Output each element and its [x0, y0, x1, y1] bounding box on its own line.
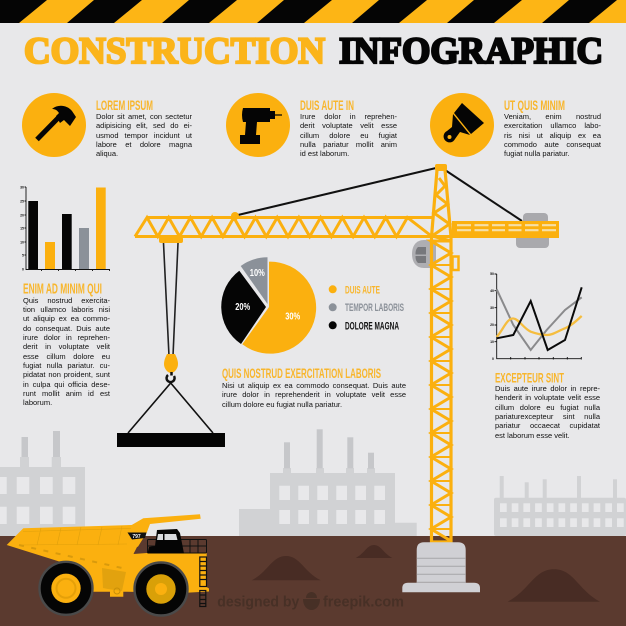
watermark: designed by	[217, 594, 299, 610]
text: quis nostrud	[222, 381, 406, 409]
text: lorem ipsum: Dolor sit amet, con sectetur	[96, 112, 192, 121]
text: enim ad minim qui: pidatat non proident, sunt	[23, 370, 110, 379]
text: lorem ipsum: usmod tempor incidunt ut	[96, 131, 192, 140]
line chart: 40	[490, 289, 494, 293]
bar chart: 15	[20, 226, 24, 230]
headings: top row: DUIS AUTE IN	[300, 97, 354, 113]
text: enim ad minim qui: ut aliquip ex ea commo-	[23, 314, 110, 323]
crane jib	[135, 212, 452, 243]
text: duis aute in: cillum dolore eu fugiat	[300, 131, 397, 140]
text: excepteur sint	[495, 384, 600, 440]
line chart: 0	[492, 357, 494, 361]
heading: excepteur sint: EXCEPTEUR SINT	[495, 370, 564, 386]
line chart: 10	[490, 340, 494, 344]
text: excepteur sint: henderit in voluptate velit esse	[495, 393, 600, 402]
pie chart: 20%	[235, 302, 250, 313]
crane cables	[238, 168, 522, 221]
pie chart legend: DUIS AUTE	[345, 284, 380, 296]
text: ut quis minim: commodo aute consequat	[504, 140, 601, 149]
dump truck	[7, 514, 209, 616]
icon: paint brush	[430, 93, 494, 157]
text: ut quis minim: exercitation ullamco labo-	[504, 121, 601, 130]
text: quis nostrud: irure dolor in reprehenderit in voluptate velit esse	[222, 390, 406, 399]
bar chart	[20, 186, 110, 272]
text: enim ad minim qui: in culpa qui officia dese-	[23, 380, 110, 389]
bar chart: 10	[20, 240, 24, 244]
text: duis aute in: Irure dolor in reprehen-	[300, 112, 397, 121]
truck rear wheel	[40, 562, 92, 615]
bar chart: 0	[22, 268, 24, 272]
text: enim ad minim qui	[23, 296, 110, 407]
headings: top row	[96, 97, 565, 113]
truck ladder	[200, 557, 206, 606]
bar chart: 30	[20, 186, 24, 190]
text: ut quis minim: ris nisi ut aliquip ex ea	[504, 131, 601, 140]
text: enim ad minim qui: do consequat. Duis aute	[23, 324, 110, 333]
headings: top row: LOREM IPSUM	[96, 97, 153, 113]
text: excepteur sint: est laborum esse velit.	[495, 431, 570, 440]
text: duis aute in: id est laborum.	[300, 149, 349, 158]
truck logo plate	[128, 532, 146, 540]
pie chart legend	[329, 284, 404, 332]
text: excepteur sint: cillum dolore eu fugiat nulla	[495, 403, 600, 412]
title	[24, 31, 603, 72]
text: ut quis minim: fugiat nulla pariatur.	[504, 149, 569, 158]
text: lorem ipsum: aliqua.	[96, 149, 118, 158]
truck body	[7, 514, 209, 597]
factory: right	[494, 476, 626, 536]
heading: enim ad minim qui: ENIM AD MINIM QUI	[23, 282, 102, 298]
crane concrete base	[402, 542, 480, 592]
factory: left	[0, 431, 85, 536]
bar chart: 25	[20, 200, 24, 204]
crane counter jib	[452, 221, 559, 238]
text: enim ad minim qui: runt mollit anim id est	[23, 389, 110, 398]
truck bed details	[20, 526, 131, 545]
crane operator cabin	[412, 240, 436, 268]
text: ut quis minim: Veniam, enim nostrud	[504, 112, 601, 121]
text: enim ad minim qui: tion ullamco laboris nisi	[23, 305, 110, 314]
title: CONSTRUCTION	[24, 31, 325, 72]
factory: middle	[239, 429, 417, 536]
text: enim ad minim qui: esse cillum dolore eu	[23, 352, 110, 361]
text: ut quis minim	[504, 112, 602, 158]
text: lorem ipsum: labore et dolore magna	[96, 140, 192, 149]
crane	[135, 164, 559, 592]
truck rail grid	[148, 540, 206, 553]
truck front wheel	[134, 562, 188, 616]
line chart	[490, 272, 582, 361]
hoist: hook, ropes and beam	[117, 243, 225, 447]
bar chart: 20	[20, 214, 24, 218]
truck cab	[148, 529, 184, 554]
ground	[0, 536, 626, 626]
text: enim ad minim qui: fugiat nulla pariatur. cu-	[23, 361, 110, 370]
watermark: freepik.com	[323, 594, 404, 610]
crane mast	[430, 164, 458, 543]
line chart: 30	[490, 306, 494, 310]
text: excepteur sint: Duis aute irure dolor in repre-	[495, 384, 600, 393]
line chart: 50	[490, 272, 494, 276]
pie chart: 30%	[285, 312, 300, 322]
text: enim ad minim qui: laborum.	[23, 398, 52, 407]
text: enim ad minim qui: irure dolor in reprehen-	[23, 333, 110, 342]
pie chart	[221, 257, 316, 354]
pie chart legend: DOLORE MAGNA	[345, 320, 399, 332]
title: INFOGRAPHIC	[339, 31, 603, 72]
text: enim ad minim qui: derit in voluptate velit	[23, 342, 110, 351]
heading: quis nostrud: QUIS NOSTRUD EXERCITATION LABORIS	[222, 365, 381, 381]
text: quis nostrud: Nisi ut aliquip ex ea commodo consequat. Duis aute	[222, 381, 406, 390]
dump truck: 797	[132, 534, 141, 540]
headings: top row: UT QUIS MINIM	[504, 97, 565, 113]
dirt mounds	[252, 545, 600, 602]
icon: drill	[226, 93, 290, 157]
truck cab wedge	[134, 543, 147, 554]
text: excepteur sint: pariatur occaecat cupidatat	[495, 421, 600, 430]
text: enim ad minim qui: Quis nostrud exercita-	[23, 296, 110, 304]
text: excepteur sint: pariaturexcepteur sint nulla	[495, 412, 600, 421]
text: quis nostrud: cillum dolore eu fugiat nulla pariatur.	[222, 400, 342, 409]
text: lorem ipsum: adipisicing elit, sed do ei-	[96, 121, 192, 130]
text: duis aute in	[300, 112, 397, 158]
line chart: 20	[490, 323, 494, 327]
crane counterweight	[516, 213, 549, 248]
pie chart legend: TEMPOR LABORIS	[345, 302, 404, 314]
bar chart: 5	[22, 254, 24, 258]
icon: hammer	[22, 93, 86, 157]
text: duis aute in: nulla pariatur mollit anim	[300, 140, 397, 149]
hazard stripe banner	[0, 0, 626, 23]
pie chart: 10%	[250, 268, 265, 279]
text: lorem ipsum	[96, 112, 192, 158]
text: duis aute in: derit voluptate velit esse	[300, 121, 397, 130]
watermark	[217, 592, 404, 610]
